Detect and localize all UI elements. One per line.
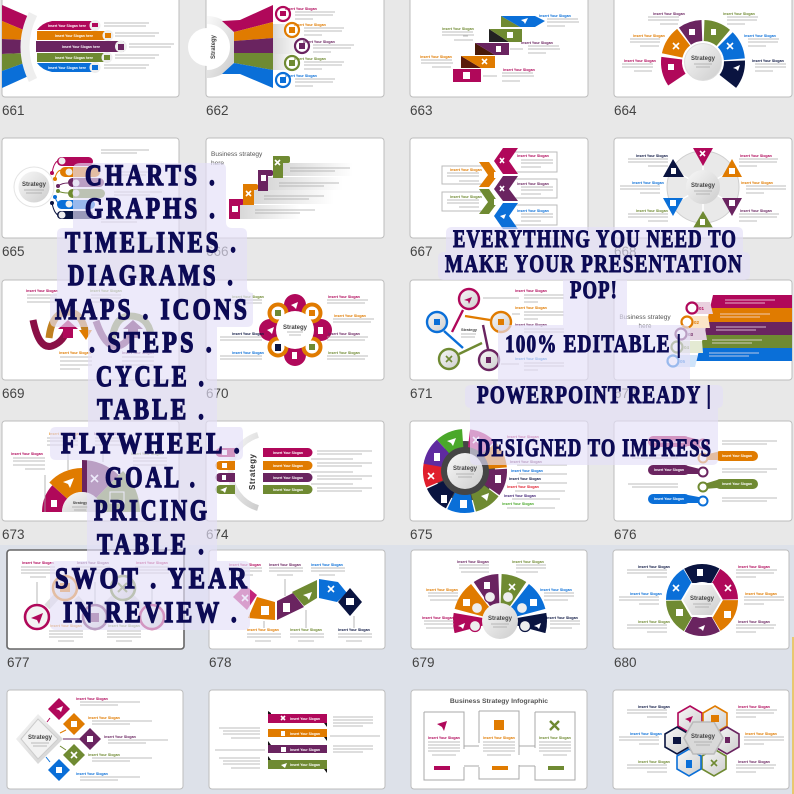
title: Business Strategy Infographic [450, 698, 548, 705]
label: 670: 670 [206, 386, 229, 401]
magnifier nodes [427, 289, 511, 370]
strategy note: Strategy [461, 327, 478, 332]
panel: slide 664 [614, 0, 792, 107]
callouts: Insert Your Slogan [328, 332, 360, 336]
right legend: Insert Your Slogan [510, 460, 542, 464]
callouts: Insert Your Slogan [334, 314, 366, 318]
alternating pills: Insert Your Slogan [654, 497, 684, 501]
headline: left feature list: MAPS . ICONS [55, 293, 250, 326]
title [619, 314, 671, 330]
option pills [50, 157, 105, 219]
step labels [420, 14, 579, 81]
title [211, 151, 263, 167]
step labels: Insert Your Slogan [503, 68, 535, 72]
segmented ring [658, 17, 748, 107]
right legend: Insert Your Slogan [509, 477, 541, 481]
label: 674: 674 [206, 527, 229, 542]
callouts: Insert Your Slogan [624, 59, 656, 63]
label: 667: 667 [410, 244, 433, 259]
panel: slide 669 [2, 280, 179, 380]
alternating pills: Insert Your Slogan [722, 482, 752, 486]
panel: slide 682 [209, 690, 385, 789]
circle chain [25, 576, 164, 629]
hexagon cluster [665, 706, 739, 776]
funnel bands [2, 5, 33, 88]
callouts [619, 565, 784, 632]
callouts: Insert Your Slogan [422, 616, 454, 620]
description lines [311, 451, 372, 491]
alternating pills: Insert Your Slogan [654, 440, 684, 444]
right legend: Insert Your Slogan [507, 485, 539, 489]
box text: Insert Your Slogan [517, 182, 549, 186]
panel: slide 684 [613, 690, 789, 789]
right callouts: Insert Your Slogan [515, 289, 547, 293]
callouts: Insert Your Slogan [22, 561, 54, 565]
title: here [638, 323, 652, 330]
hexagon hub: Strategy [690, 596, 715, 602]
callouts: Insert Your Slogan [104, 735, 136, 739]
panel: slide 678 [209, 550, 385, 649]
callouts: Insert Your Slogan [76, 772, 108, 776]
tiers [696, 295, 792, 361]
right bars: Insert Your Slogan [273, 464, 303, 468]
callouts: Insert Your Slogan [636, 154, 668, 158]
headline: left feature list: CYCLE . [96, 360, 207, 393]
callouts: Insert Your Slogan [740, 154, 772, 158]
slogans: Insert Your Slogan [294, 23, 326, 27]
headline: left feature list: . STEPS . [89, 326, 215, 359]
callouts: Insert Your Slogan [738, 565, 770, 569]
callouts: Insert Your Slogan [290, 628, 322, 632]
callouts: Insert Your Slogan [88, 716, 120, 720]
number tabs: 01 [699, 306, 705, 311]
strategy diamond: Strategy [28, 735, 53, 741]
right legend: Insert Your Slogan [511, 469, 543, 473]
callouts: Insert Your Slogan [77, 561, 109, 565]
right callouts: Insert Your Slogan [515, 323, 547, 327]
nine-segment wheel: Strategy [453, 466, 478, 472]
callouts: Insert Your Slogan [328, 295, 360, 299]
callouts: Insert Your Slogan [638, 760, 670, 764]
callouts: Insert Your Slogan [512, 560, 544, 564]
headline: left feature list: IN REVIEW . [63, 596, 240, 629]
fan bands [222, 5, 273, 88]
callouts: Insert Your Slogan [90, 289, 122, 293]
bars with slogans: Insert Your Slogan here [55, 34, 93, 38]
headline: left feature list: CHARTS . [85, 159, 218, 192]
number tabs: 04 [684, 345, 690, 350]
title: Business strategy [619, 314, 671, 321]
callouts: Insert Your Slogan [741, 181, 773, 185]
panel: slide 667 [410, 138, 588, 238]
step labels: Insert Your Slogan [420, 55, 452, 59]
alternating pills [648, 436, 758, 506]
strategy note [461, 327, 478, 337]
panel: slide 672 [614, 280, 792, 380]
hub circle [14, 167, 54, 207]
panel: slide 662 [188, 0, 384, 97]
right bars [263, 448, 312, 494]
label: 676: 676 [614, 527, 637, 542]
callouts: Insert Your Slogan [740, 209, 772, 213]
callouts: Insert Your Slogan [136, 561, 168, 565]
headline: right tagline: 100% EDITABLE | [505, 331, 682, 358]
title: Business strategy [211, 151, 263, 158]
callouts: Insert Your Slogan [540, 588, 572, 592]
right bars: Insert Your Slogan [273, 476, 303, 480]
triangles [663, 148, 742, 228]
description lines [101, 150, 162, 222]
callouts: Insert Your Slogan [311, 563, 343, 567]
label: 663: 663 [410, 103, 433, 118]
callouts: Insert Your Slogan [653, 12, 685, 16]
label: 666: 666 [206, 244, 229, 259]
box text: Insert Your Slogan [450, 195, 482, 199]
hub and icons [51, 475, 124, 512]
column contents: Insert Your Slogan [483, 736, 515, 740]
panel: slide 670 [206, 280, 384, 380]
callouts: Insert Your Slogan [338, 628, 370, 632]
numbered circles [273, 7, 309, 87]
box text: Insert Your Slogan [517, 209, 549, 213]
petal wheel: Strategy [691, 183, 716, 189]
callouts: Insert Your Slogan [744, 34, 776, 38]
panel: slide 675 [410, 421, 588, 521]
box text: Insert Your Slogan [517, 154, 549, 158]
callouts: Insert Your Slogan [426, 588, 458, 592]
callouts [11, 432, 167, 512]
callouts: Insert Your Slogan [638, 620, 670, 624]
right legend: Insert Your Slogan [502, 502, 534, 506]
flower cycle: Strategy [283, 325, 308, 331]
callouts: Insert Your Slogan [752, 59, 784, 63]
callouts: Insert Your Slogan [26, 289, 58, 293]
center hub [668, 29, 740, 80]
number tabs: 02 [694, 320, 700, 325]
callouts [422, 560, 580, 628]
callouts: Insert Your Slogan [50, 624, 82, 628]
callouts: Insert Your Slogan [122, 351, 154, 355]
label: 661: 661 [2, 103, 25, 118]
headline: left feature list: DIAGRAMS . [68, 259, 236, 292]
headline: right tagline: DESIGNED TO IMPRESS [477, 435, 712, 462]
label: 675: 675 [410, 527, 433, 542]
ribbons: Insert Your Slogan [290, 763, 320, 767]
hexagon hub [673, 569, 731, 631]
callouts: Insert Your Slogan [88, 753, 120, 757]
bars with slogans [36, 20, 127, 73]
hub and icons: Strategy [73, 501, 87, 505]
right legend: Insert Your Slogan [507, 435, 539, 439]
number tabs: 05 [680, 359, 686, 364]
arrow heads [58, 320, 143, 340]
hexagon cluster: Strategy [691, 734, 716, 740]
label: 668: 668 [614, 244, 637, 259]
callouts: Insert Your Slogan [94, 432, 126, 436]
panel: slide 676 [614, 421, 792, 521]
bars with slogans: Insert Your Slogan here [48, 24, 86, 28]
callouts: Insert Your Slogan [108, 624, 140, 628]
headline: right tagline [445, 226, 743, 462]
box text [447, 154, 553, 221]
C ring [231, 435, 258, 508]
description lines [104, 23, 174, 68]
panel: slide 666 [206, 138, 384, 238]
label: 662: 662 [206, 103, 229, 118]
callouts [76, 697, 168, 780]
half fan [453, 574, 547, 633]
label: 677: 677 [7, 655, 30, 670]
ribbons [268, 711, 327, 773]
strategy diamond [16, 714, 63, 764]
callouts: Insert Your Slogan [630, 592, 662, 596]
callouts: Insert Your Slogan [131, 452, 163, 456]
label: 672: 672 [614, 386, 637, 401]
step labels: Insert Your Slogan [521, 41, 553, 45]
step labels: Insert Your Slogan [442, 27, 474, 31]
description lines [628, 441, 777, 501]
headline: right tagline: POP! [570, 277, 618, 304]
headline: left feature list: FLYWHEEL . [61, 427, 243, 460]
step labels: Insert Your Slogan [539, 14, 571, 18]
hub circle: Strategy [22, 182, 47, 188]
stair steps [229, 156, 353, 219]
headline: left feature list: SWOT . YEAR [55, 562, 250, 595]
strategy ring: Strategy [211, 34, 217, 59]
rising steps [453, 16, 545, 82]
panel: slide 661 [2, 0, 179, 97]
callouts [21, 561, 169, 641]
callouts: Insert Your Slogan [457, 560, 489, 564]
title: here [211, 160, 224, 167]
callouts: Insert Your Slogan [738, 760, 770, 764]
hub and number chips [458, 582, 541, 639]
label: 678: 678 [209, 655, 232, 670]
panel: slide 665 [2, 138, 179, 238]
headline: left feature list: TABLE . [97, 528, 207, 561]
hub and number chips: Strategy [488, 616, 513, 622]
hexagon ring [665, 563, 739, 637]
callouts: Insert Your Slogan [59, 351, 91, 355]
callouts [622, 12, 786, 71]
panel: slide 683 [411, 690, 587, 789]
panel: slide 673 [2, 421, 179, 567]
winding arrows [33, 312, 151, 346]
headline: right tagline: POWERPOINT READY | [477, 382, 712, 409]
label: 669: 669 [2, 386, 25, 401]
column contents: Insert Your Slogan [539, 736, 571, 740]
label: 679: 679 [412, 655, 435, 670]
bars with slogans: Insert Your Slogan here [55, 56, 93, 60]
callouts: Insert Your Slogan [630, 732, 662, 736]
slogans [285, 7, 354, 86]
bars with slogans: Insert Your Slogan here [48, 66, 86, 70]
callouts [620, 154, 786, 221]
label: 680: 680 [614, 655, 637, 670]
right bars: Insert Your Slogan [273, 451, 303, 455]
callouts: Insert Your Slogan [738, 620, 770, 624]
ribbons: Insert Your Slogan [290, 717, 320, 721]
callouts: Insert Your Slogan [229, 563, 261, 567]
headline: left feature list: GRAPHS . [85, 192, 218, 225]
box text: Insert Your Slogan [450, 168, 482, 172]
outlined columns [424, 711, 575, 780]
slogans: Insert Your Slogan [294, 57, 326, 61]
panel: slide 680 [613, 550, 789, 649]
panel: slide 674 [206, 421, 384, 521]
headline: left feature list: PRICING [94, 494, 210, 527]
callouts: Insert Your Slogan [76, 697, 108, 701]
strategy ring [188, 20, 234, 74]
ribbons: Insert Your Slogan [290, 748, 320, 752]
panel: slide 679 [410, 550, 588, 650]
number tabs: 03 [688, 332, 694, 337]
callouts [619, 705, 784, 772]
chevrons [479, 148, 518, 229]
right callouts: Insert Your Slogan [515, 357, 547, 361]
panel: slide 681 [7, 690, 183, 789]
callouts [228, 563, 372, 641]
tier text lines [709, 300, 775, 356]
callouts: Insert Your Slogan [745, 592, 777, 596]
callouts: Insert Your Slogan [633, 34, 665, 38]
callouts: Insert Your Slogan [638, 705, 670, 709]
callouts: Insert Your Slogan [247, 628, 279, 632]
outlined text boxes [442, 152, 557, 225]
alternating pills: Insert Your Slogan [722, 454, 752, 458]
callouts: Insert Your Slogan [328, 351, 360, 355]
bars with slogans: Insert Your Slogan here [62, 45, 100, 49]
right bars: Insert Your Slogan [273, 488, 303, 492]
label: 673: 673 [2, 527, 25, 542]
petal wheel [667, 151, 739, 223]
callouts: Insert Your Slogan [232, 351, 264, 355]
right legend [502, 435, 567, 508]
panel: slide 677 [7, 550, 184, 649]
label: 671: 671 [410, 386, 433, 401]
callouts: Insert Your Slogan [269, 563, 301, 567]
wave segments [233, 579, 362, 620]
rotated strategy label: Strategy [248, 453, 257, 490]
callouts: Insert Your Slogan [49, 432, 81, 436]
flower cycle [259, 294, 332, 366]
callouts: Insert Your Slogan [11, 452, 43, 456]
slogans: Insert Your Slogan [303, 40, 335, 44]
headline: left feature list: TIMELINES . [65, 226, 239, 259]
nine-segment wheel [418, 424, 512, 518]
right callouts [483, 289, 564, 370]
callouts [220, 295, 374, 359]
right legend: Insert Your Slogan [504, 494, 536, 498]
callouts: Insert Your Slogan [745, 732, 777, 736]
panel: slide 671 [410, 280, 588, 380]
center hub: Strategy [691, 56, 716, 62]
callouts: Insert Your Slogan [232, 332, 264, 336]
description lines [255, 168, 350, 213]
ribbons: Insert Your Slogan [290, 732, 320, 736]
callouts: Insert Your Slogan [723, 12, 755, 16]
callouts: Insert Your Slogan [738, 705, 770, 709]
callouts: Insert Your Slogan [636, 209, 668, 213]
number tabs [668, 302, 713, 367]
slogans: Insert Your Slogan [285, 74, 317, 78]
overlay backing: left column [50, 163, 253, 630]
colored diamonds [46, 698, 101, 781]
slogans: Insert Your Slogan [285, 7, 317, 11]
callouts: Insert Your Slogan [632, 181, 664, 185]
column contents [428, 720, 571, 770]
label: 665: 665 [2, 244, 25, 259]
panel: slide 668 [614, 138, 792, 238]
callouts: Insert Your Slogan [546, 616, 578, 620]
headline: left feature list: TABLE . [97, 393, 207, 426]
panel: slide 663 [410, 0, 588, 97]
callouts [26, 289, 154, 369]
headline: left feature list: GOAL . [105, 461, 198, 494]
callouts: Insert Your Slogan [638, 565, 670, 569]
semicircle fan [27, 457, 137, 567]
description lines and arrows [215, 717, 380, 768]
callouts: Insert Your Slogan [232, 295, 264, 299]
right callouts: Insert Your Slogan [515, 306, 547, 310]
alternating pills: Insert Your Slogan [654, 468, 684, 472]
overlay backing: right column [438, 227, 750, 465]
label: 664: 664 [614, 103, 637, 118]
left stubs [216, 448, 235, 494]
headline: left feature list [55, 159, 250, 629]
column contents: Insert Your Slogan [428, 736, 460, 740]
